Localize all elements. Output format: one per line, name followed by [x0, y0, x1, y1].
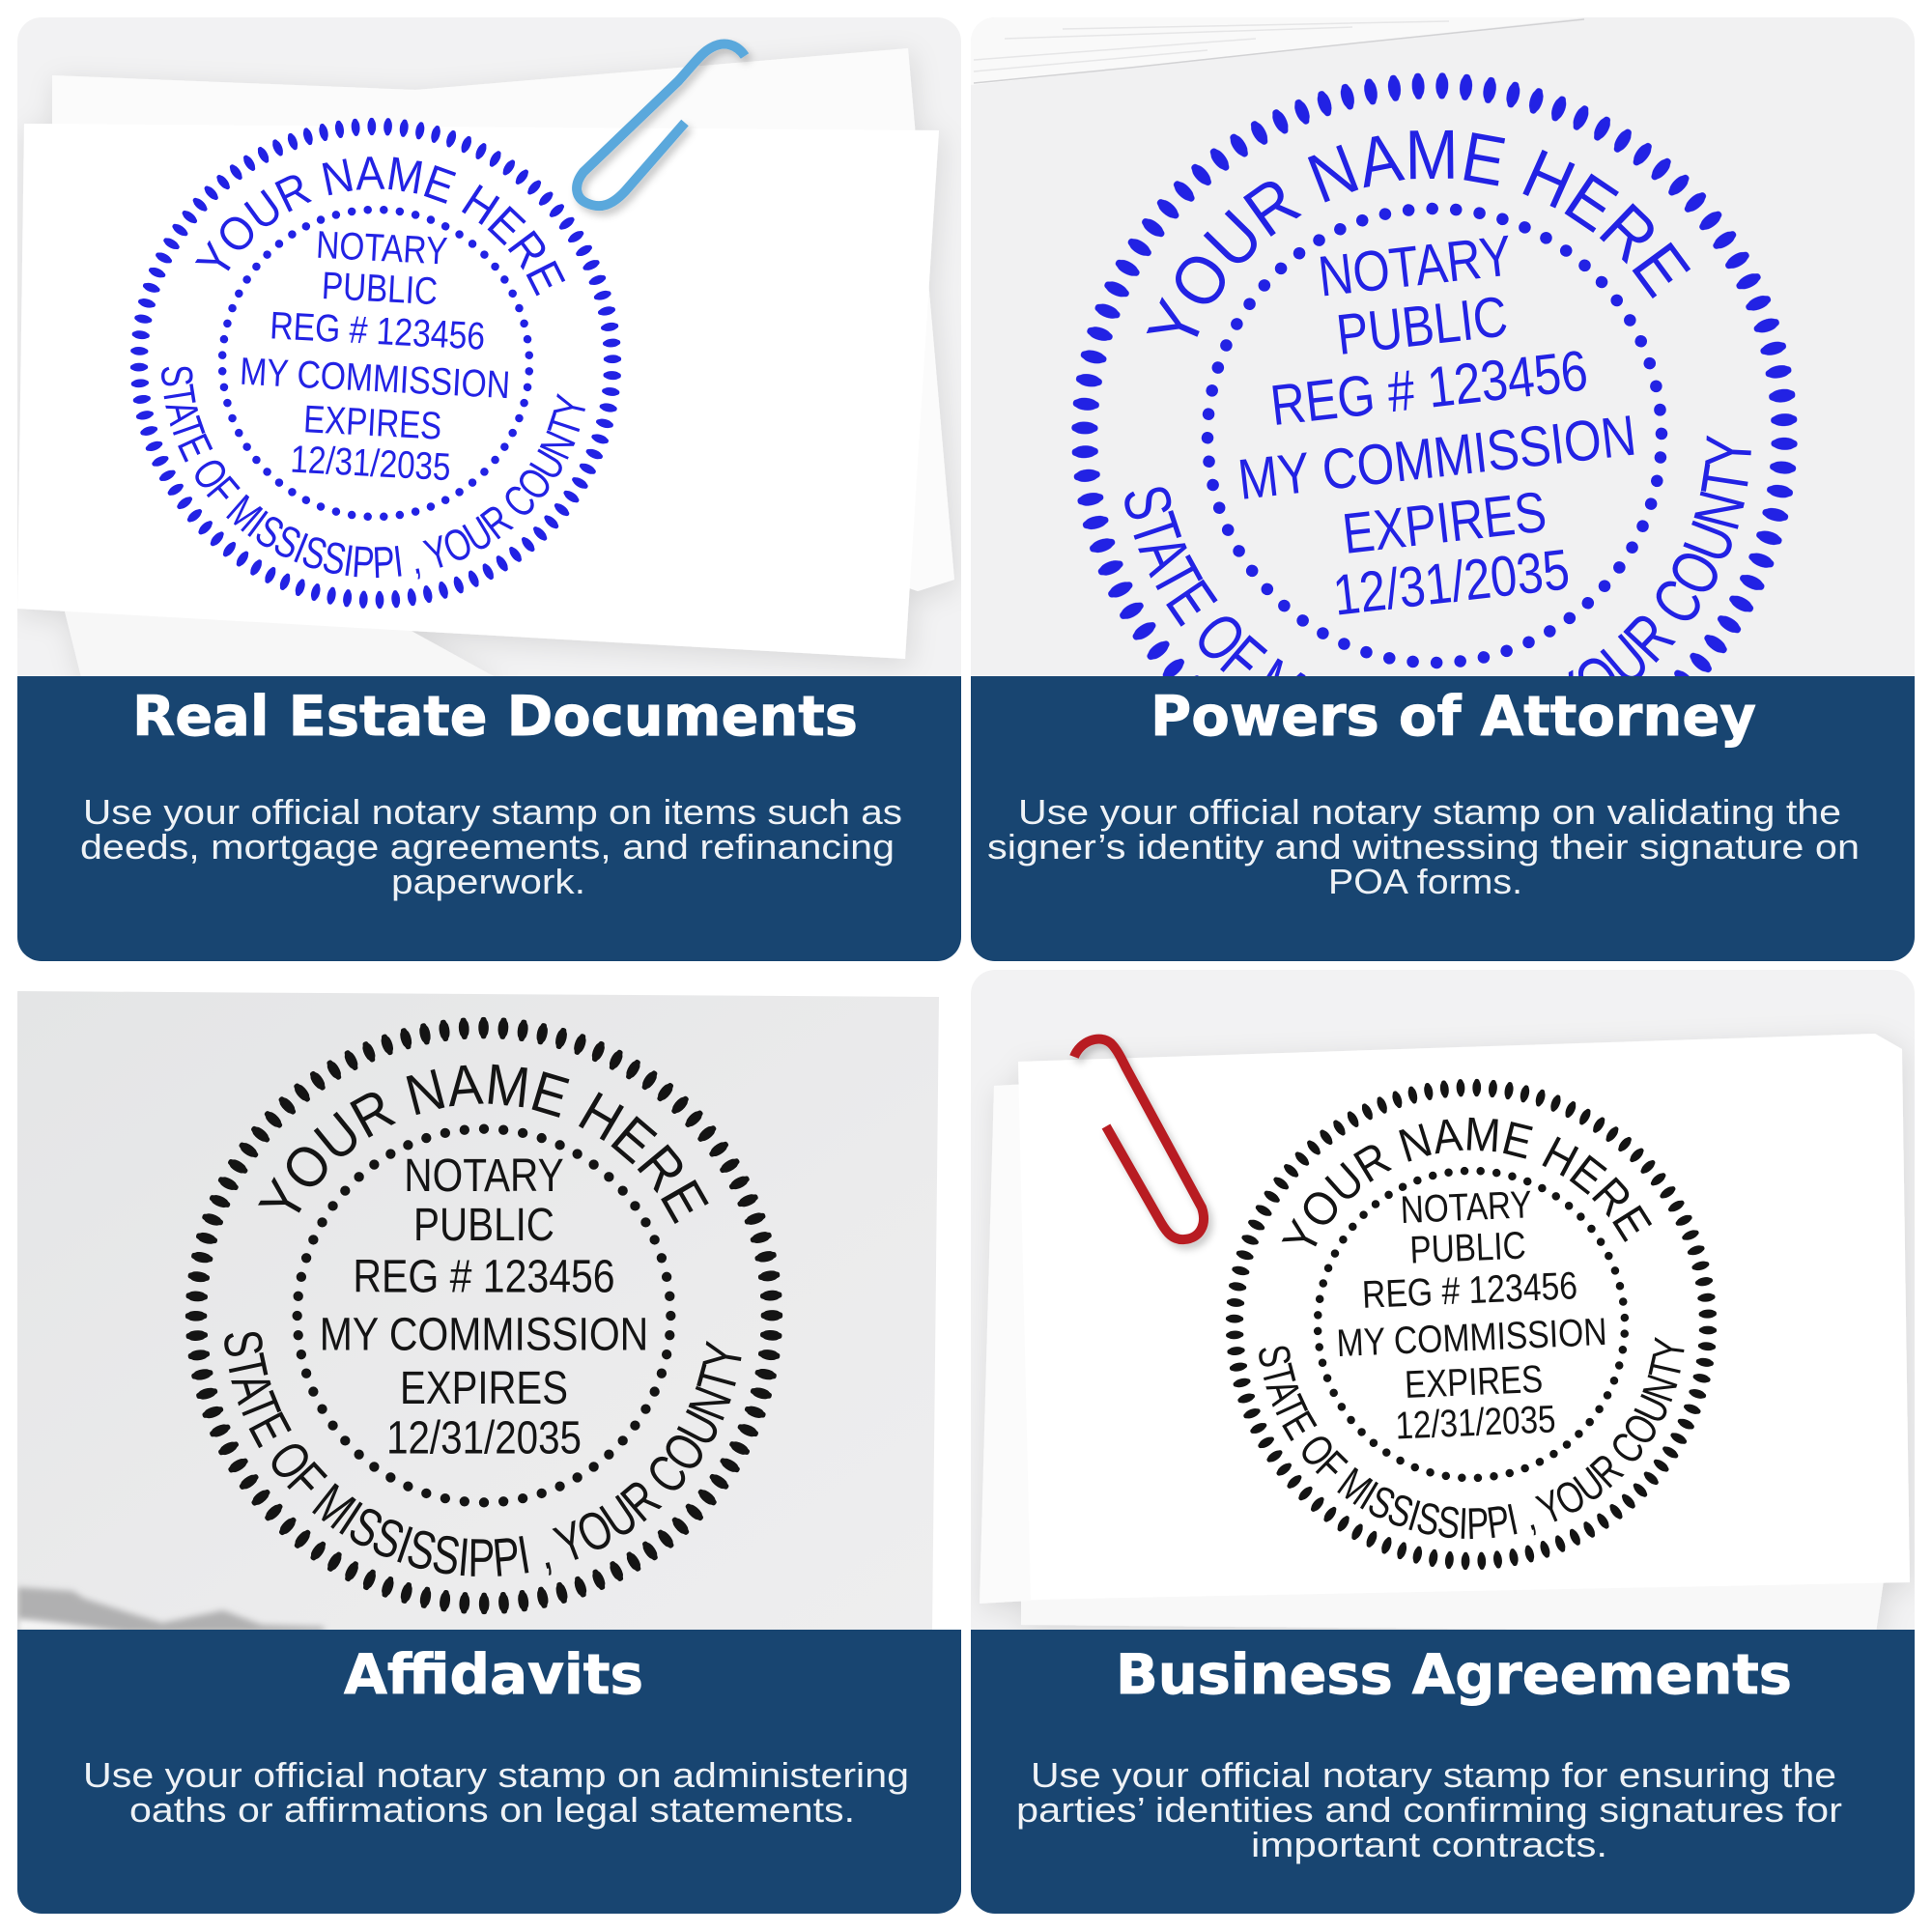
stamp: black notary seal: 12/31/2035 — [386, 1411, 582, 1463]
description: oaths or affirmations on legal statements. — [129, 1790, 855, 1830]
stamp: blue notary seal: EXPIRES — [302, 398, 442, 448]
stamp: black notary seal: 12/31/2035 — [1395, 1398, 1556, 1448]
stamp: black notary seal: NOTARY — [1400, 1183, 1533, 1232]
description: Use your official notary stamp on administering — [83, 1755, 909, 1795]
caption panel — [17, 1630, 961, 1914]
stamp: blue notary seal, close-up: EXPIRES — [1339, 479, 1549, 566]
stamp: black notary seal: STATE OF MISSISSIPPI , YOUR COUNTY — [1259, 1337, 1685, 1540]
stamp: black notary seal — [1225, 1078, 1718, 1571]
heading: Affidavits — [344, 1643, 643, 1707]
description — [83, 1755, 909, 1830]
textured paper sheet — [17, 991, 939, 1633]
paper stack — [17, 48, 954, 681]
stamp: blue notary seal, close-up: PUBLIC — [1333, 283, 1511, 367]
stamp: blue notary seal, close-up: YOUR NAME HERE — [1146, 129, 1690, 337]
stamp: black notary seal: MY COMMISSION — [1336, 1311, 1607, 1365]
stamp: blue notary seal: STATE OF MISSISSIPPI , YOUR COUNTY — [161, 367, 585, 580]
stamp: blue notary seal: REG # 123456 — [269, 304, 486, 358]
paper stack — [980, 1034, 1910, 1633]
stamp: black notary seal: REG # 123456 — [353, 1251, 615, 1303]
stamp: black notary seal: PUBLIC — [1409, 1224, 1526, 1272]
stamp: blue notary seal: 12/31/2035 — [290, 439, 452, 489]
stamp: black notary seal: EXPIRES — [400, 1362, 568, 1414]
paper stack edge — [971, 17, 1584, 85]
torn paper edge — [17, 1587, 324, 1633]
description: Use your official notary stamp for ensuring the — [1031, 1755, 1836, 1795]
description: signer’s identity and witnessing their signature on — [987, 827, 1860, 867]
stamp: black notary seal: NOTARY — [404, 1150, 564, 1202]
photo background — [17, 17, 961, 684]
description: Use your official notary stamp on validating the — [1018, 792, 1841, 832]
stamp: black notary seal: STATE OF MISSISSIPPI , YOUR COUNTY — [224, 1332, 742, 1577]
description: deeds, mortgage agreements, and refinancing — [80, 827, 895, 867]
stamp: blue notary seal: PUBLIC — [321, 265, 439, 313]
heading: Business Agreements — [1116, 1643, 1792, 1707]
photo background — [971, 17, 1915, 684]
stamp: blue notary seal, close-up: REG # 123456 — [1267, 337, 1591, 438]
stamp: blue notary seal: NOTARY — [315, 224, 448, 273]
description — [1016, 1755, 1842, 1864]
caption panel — [17, 676, 961, 961]
description: POA forms. — [1328, 862, 1522, 901]
panel: affidavits — [17, 991, 961, 1914]
caption panel — [971, 676, 1915, 961]
photo background — [17, 970, 961, 1636]
caption panel — [971, 1630, 1915, 1914]
description: parties’ identities and confirming signatures for — [1016, 1790, 1842, 1830]
icon: red paper clip — [1074, 1039, 1204, 1239]
stamp: black notary seal — [185, 1016, 782, 1615]
stamp: blue notary seal, close-up: MY COMMISSION — [1235, 403, 1639, 512]
panel: powers of attorney — [971, 17, 1915, 961]
photo background — [971, 970, 1915, 1636]
stamp: black notary seal: PUBLIC — [413, 1199, 554, 1251]
description — [987, 792, 1860, 901]
panel: business agreements — [971, 970, 1915, 1914]
stamp: blue notary seal: MY COMMISSION — [239, 351, 511, 407]
stamp: black notary seal: EXPIRES — [1404, 1358, 1544, 1406]
icon: blue paper clip — [577, 44, 745, 206]
description: Use your official notary stamp on items such as — [83, 792, 902, 832]
panel: real estate documents — [17, 17, 961, 961]
stamp: black notary seal: YOUR NAME HERE — [1281, 1117, 1652, 1246]
stamp: blue notary seal, close-up: NOTARY — [1315, 222, 1516, 309]
stamp: blue notary seal, close-up: STATE OF MISSISSIPPI , YOUR COUNTY — [1124, 435, 1751, 676]
description: paperwork. — [391, 862, 585, 901]
heading: Real Estate Documents — [132, 685, 858, 749]
stamp: blue notary seal — [129, 118, 622, 609]
stamp: black notary seal: MY COMMISSION — [320, 1308, 648, 1360]
stamp: black notary seal: REG # 123456 — [1361, 1264, 1578, 1317]
stamp: blue notary seal: YOUR NAME HERE — [195, 156, 566, 296]
heading: Powers of Attorney — [1151, 685, 1756, 749]
stamp: blue notary seal, close-up — [1071, 72, 1798, 676]
stamp: blue notary seal, close-up: 12/31/2035 — [1330, 536, 1573, 628]
description: important contracts. — [1251, 1825, 1607, 1864]
description — [80, 792, 902, 901]
stamp: black notary seal: YOUR NAME HERE — [258, 1065, 709, 1224]
